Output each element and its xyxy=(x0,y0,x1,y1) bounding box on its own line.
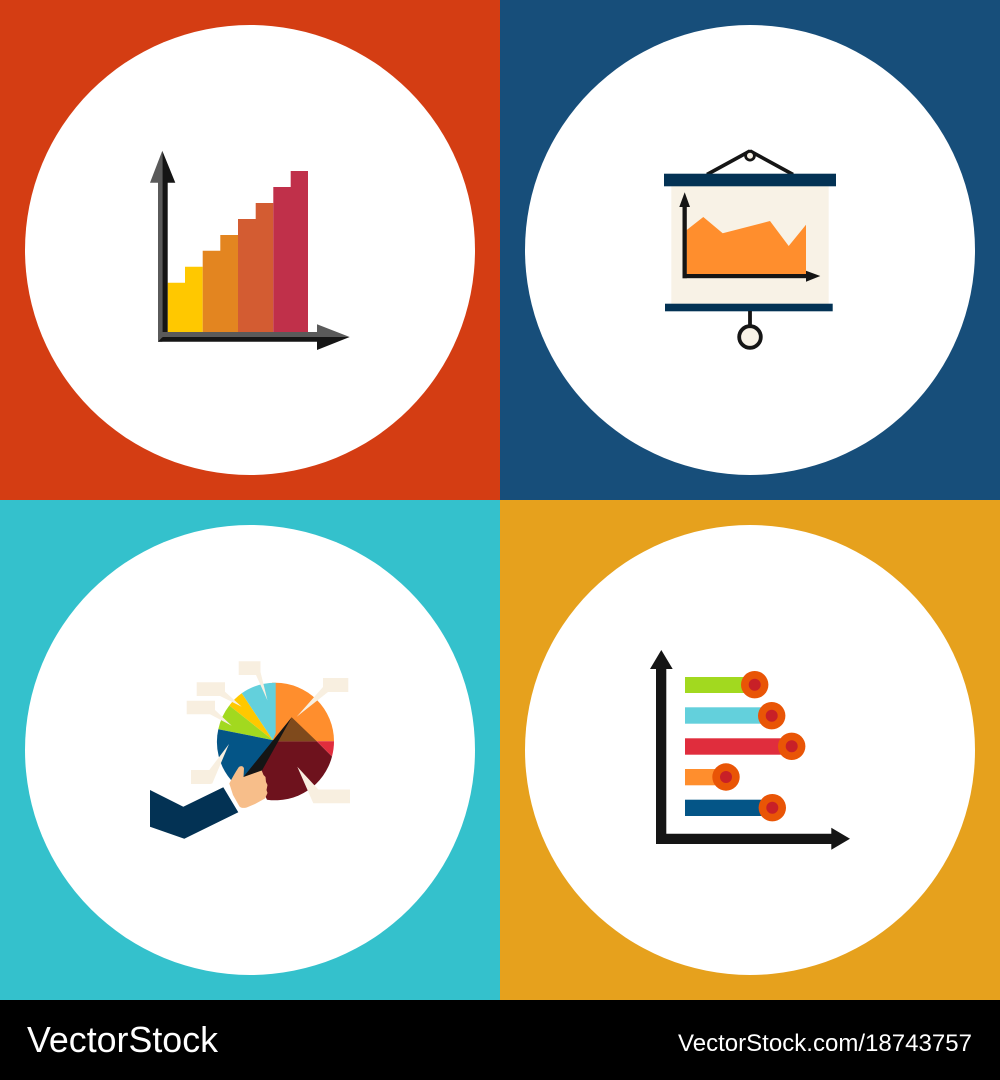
icon: hand xyxy=(229,766,268,808)
icon: hanger xyxy=(707,151,793,174)
icon: horizontal axis arrow xyxy=(158,324,350,350)
callout: lower left label xyxy=(191,744,229,784)
bar: blue xyxy=(685,794,786,821)
panel: bar chart icon on red xyxy=(0,0,500,500)
callout: top label xyxy=(239,661,268,700)
bottom roller bar xyxy=(665,304,833,311)
icon: chart axes arrows xyxy=(679,192,820,282)
image id url: VectorStock.com/18743757 xyxy=(678,1030,972,1057)
pie chart xyxy=(217,683,334,800)
bar: cyan xyxy=(685,702,785,729)
panel: projector screen icon on navy xyxy=(500,0,1000,500)
top roller bar xyxy=(664,174,836,186)
icon: pointer stick xyxy=(243,717,292,778)
callout: middle left label xyxy=(187,701,232,726)
footer bar xyxy=(0,1000,1000,1080)
bar: orange xyxy=(685,763,740,791)
callout: upper left label xyxy=(197,682,242,707)
panel: horizontal bars icon on amber xyxy=(500,500,1000,1000)
icon: vertical axis arrow xyxy=(150,151,175,342)
icon: pull cord ring xyxy=(739,311,761,348)
callout: lower right label xyxy=(297,767,350,803)
bar: red xyxy=(685,733,805,760)
stepped bars xyxy=(168,171,308,332)
screen background xyxy=(671,186,829,304)
icon: sleeve xyxy=(150,787,238,839)
panel: pie chart presentation icon on teal xyxy=(0,500,500,1000)
icon: chart axes arrows xyxy=(650,650,850,850)
callout: top right label xyxy=(297,678,348,717)
bar: green xyxy=(685,671,768,698)
area chart xyxy=(687,217,806,275)
brand name: VectorStock xyxy=(27,1019,219,1060)
